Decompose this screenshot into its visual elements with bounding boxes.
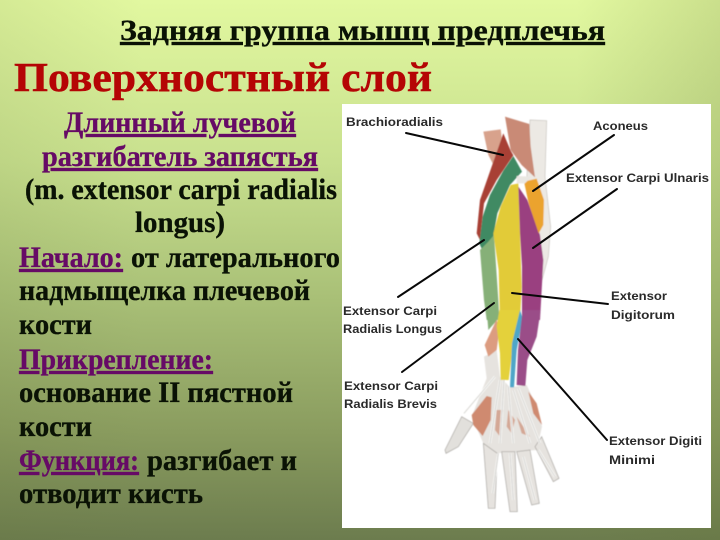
labels: muscle names: Radialis Brevis xyxy=(344,397,437,411)
insertion xyxy=(19,343,293,443)
leader lines xyxy=(398,133,617,440)
function: отводит кисть xyxy=(19,477,203,510)
muscle name: Длинный лучевой xyxy=(64,106,296,139)
labels: muscle names: Extensor xyxy=(611,289,667,303)
function: Функция: xyxy=(19,444,139,477)
labels: muscle names: Aconeus xyxy=(593,119,648,133)
latin name xyxy=(25,173,337,239)
origin: от латерального xyxy=(131,241,340,274)
panel: anatomy diagram xyxy=(342,104,711,528)
labels: muscle names: Extensor Carpi xyxy=(344,379,438,393)
insertion: кости xyxy=(19,410,92,443)
labels: muscle names: Brachioradialis xyxy=(346,115,443,129)
wrist and palm xyxy=(472,350,542,453)
function: разгибает и xyxy=(147,444,297,477)
title: Задняя группа мышц предплечья xyxy=(120,14,605,47)
labels: muscle names: Extensor Carpi Ulnaris xyxy=(566,171,709,185)
muscle name: разгибатель запястья xyxy=(42,140,318,173)
labels: muscle names: Extensor Digiti xyxy=(609,434,702,448)
heading: superficial layer: Поверхностный слой xyxy=(14,54,432,100)
insertion: Прикрепление: xyxy=(19,343,213,376)
muscle name xyxy=(42,106,318,173)
labels: muscle names xyxy=(343,115,709,467)
labels: muscle names: Minimi xyxy=(609,453,655,467)
origin xyxy=(19,241,340,341)
insertion: основание II пястной xyxy=(19,376,293,409)
labels: muscle names: Digitorum xyxy=(611,308,675,322)
illustration: forearm muscles xyxy=(445,117,559,512)
function xyxy=(19,444,297,510)
origin: Начало: xyxy=(19,241,123,274)
labels: muscle names: Radialis Longus xyxy=(343,322,442,336)
latin name: longus) xyxy=(135,206,225,239)
labels: muscle names: Extensor Carpi xyxy=(343,304,437,318)
origin: надмыщелка плечевой xyxy=(19,274,310,307)
origin: кости xyxy=(19,308,92,341)
latin name: (m. extensor carpi radialis xyxy=(25,173,337,206)
text block: muscle description xyxy=(19,106,340,510)
